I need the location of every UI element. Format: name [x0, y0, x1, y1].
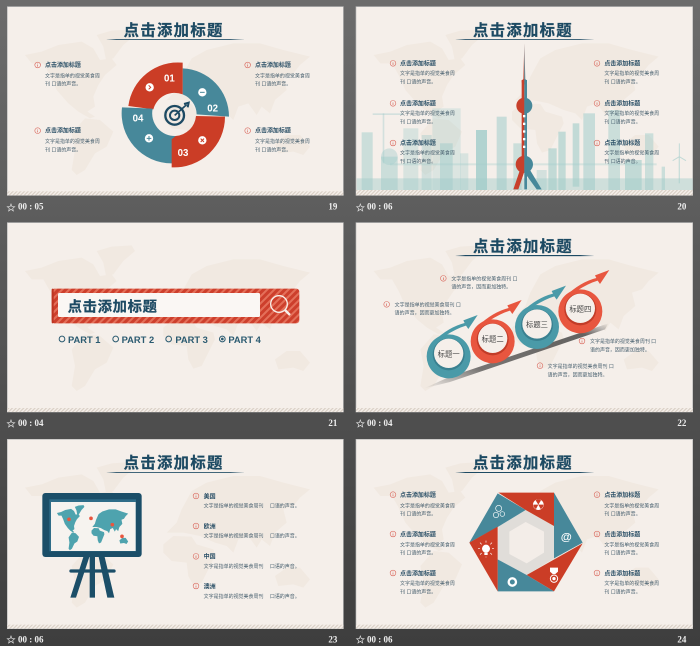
text block: right 2: 刊 口语的声音。 — [604, 550, 641, 557]
text block: left 1 — [390, 59, 455, 85]
step 4 — [558, 270, 609, 333]
text block: left 3 — [390, 139, 455, 165]
panel: slide 22 rising arrows — [356, 223, 693, 428]
step 1 — [427, 315, 478, 378]
icon: molecule — [493, 505, 505, 518]
text block: right 3: 点击添加标题 — [604, 569, 640, 577]
icon: magnifier — [271, 296, 290, 315]
text block: Australia: 澳洲 — [204, 582, 216, 590]
text block: left 2 — [390, 99, 455, 125]
footer: timer: 00 : 05 — [18, 202, 44, 212]
text block: lower right: 点击添加标题 — [255, 127, 291, 135]
title: 点击添加标题 — [124, 21, 224, 39]
text block: upper right: 刊 口语的声音。 — [255, 81, 291, 88]
text block: China: 中国 — [204, 553, 216, 561]
donut diagram: 03 — [178, 148, 189, 159]
icon: at sign: @ — [561, 531, 572, 543]
text block: left 1: 文字是指单的视觉美食周 — [400, 70, 455, 77]
title: 点击添加标题 — [473, 21, 573, 39]
footer: timer — [7, 634, 44, 644]
text block: left 3: 刊 口语的声音。 — [400, 589, 436, 596]
text block: left 1 — [390, 491, 455, 518]
text block: right 1: 点击添加标题 — [604, 491, 640, 499]
text block: right 3: 刊 口语的声音。 — [604, 158, 641, 165]
step 2 — [471, 300, 522, 363]
text block: right 1: 点击添加标题 — [604, 59, 640, 67]
tower — [513, 43, 542, 189]
step 3: 标题三 — [526, 320, 548, 329]
icon: light bulb — [478, 541, 494, 557]
text block: left 3: 点击添加标题 — [400, 139, 436, 147]
text block: bottom — [537, 363, 614, 378]
radio options: PART 1 — [68, 335, 100, 345]
text block: left 2: 点击添加标题 — [400, 530, 436, 538]
text block: right 2 — [594, 530, 659, 557]
radio options: PART 4 — [228, 335, 262, 345]
text block: left 1: 文字是指单的视觉美食周 — [400, 502, 455, 509]
footer: timer: 00 : 06 — [18, 634, 44, 644]
radio options: PART 3 — [175, 335, 208, 345]
footer: page number: 22 — [677, 418, 687, 428]
footer: timer — [7, 418, 44, 428]
text block: left 2: 刊 口语的声音。 — [400, 118, 436, 125]
title: 点击添加标题 — [473, 237, 573, 255]
panel: slide 24 hexagon — [356, 439, 693, 644]
text block: right 2: 刊 口语的声音。 — [604, 118, 641, 125]
text block: Europe: 文字是指单的视觉美食周刊 口语的声音。 — [204, 533, 300, 540]
text block: upper right: 点击添加标题 — [255, 61, 291, 69]
footer: page number: 23 — [328, 634, 338, 644]
text block: right 2 — [594, 99, 659, 125]
text block: upper left: 点击添加标题 — [45, 61, 81, 69]
text block: left 3 — [390, 569, 455, 596]
text block: left 2: 文字是指单的视觉美食周 — [400, 110, 455, 117]
text block: USA: 文字是指单的视觉美食周刊 口语的声音。 — [204, 503, 300, 510]
title: 点击添加标题 — [124, 454, 224, 472]
text block: bottom: 语的声音，因而更加独特。 — [548, 371, 607, 378]
text block: left 3: 刊 口语的声音。 — [400, 158, 436, 165]
footer: timer — [7, 202, 44, 212]
text block: left 1: 点击添加标题 — [400, 59, 436, 67]
footer: timer: 00 : 06 — [367, 634, 393, 644]
step 1: 标题一 — [438, 349, 460, 358]
text block: right 1: 刊 口语的声音。 — [604, 78, 641, 85]
text block: lower left: 刊 口语的声音。 — [45, 146, 81, 153]
text block: upper left: 文字是指单的视觉美食周 — [45, 72, 100, 79]
text block: USA — [193, 492, 300, 510]
text block: right 3 — [594, 139, 659, 165]
ground shadow — [424, 323, 608, 388]
text block: left 1: 刊 口语的声音。 — [400, 511, 436, 518]
text block: right 1: 文字是指单的视觉美食周 — [604, 70, 659, 77]
panel: slide 19 circular diagram — [7, 7, 343, 212]
icon: target — [165, 103, 189, 125]
text block: left 2: 文字是指单的视觉美食周 — [400, 542, 455, 549]
step 3 — [515, 286, 566, 349]
panel: slide 21 search bar — [7, 223, 343, 428]
text block: right 3: 刊 口语的声音。 — [604, 589, 641, 596]
search bar — [52, 289, 299, 323]
title: 点击添加标题 — [473, 454, 573, 472]
search bar title: 点击添加标题 — [68, 297, 158, 315]
text block: lower left — [35, 127, 100, 153]
text block: bottom: 文字是指单的视觉美食周刊 口 — [548, 363, 614, 370]
text block: left 3: 文字是指单的视觉美食周 — [400, 150, 455, 157]
footer: page number: 24 — [677, 634, 687, 644]
text block: Europe: 欧洲 — [204, 522, 216, 530]
text block: right 2: 点击添加标题 — [604, 99, 640, 107]
text block: left: 语的声音，因而更加独特。 — [395, 310, 454, 317]
text block: right 3: 点击添加标题 — [604, 139, 640, 147]
footer: page number: 19 — [328, 202, 338, 212]
donut diagram: 04 — [133, 114, 144, 125]
text block: left 2: 刊 口语的声音。 — [400, 550, 436, 557]
text block: top: 语的声音，因而更加独特。 — [451, 284, 511, 291]
text block: right 3 — [594, 569, 659, 596]
icon: cycle — [509, 578, 516, 586]
text block: left 2 — [390, 530, 455, 557]
text block: right 3: 文字是指单的视觉美食周 — [604, 580, 659, 587]
text block: right 1 — [594, 59, 659, 85]
text block: right 1 — [594, 491, 659, 518]
text block: right 3: 文字是指单的视觉美食周 — [604, 150, 659, 157]
text block: upper right: 文字是指单的视觉美食周 — [255, 72, 310, 79]
footer: timer: 00 : 04 — [18, 418, 44, 428]
donut diagram — [122, 62, 229, 167]
text block: upper left: 刊 口语的声音。 — [45, 81, 81, 88]
text block: Australia: 文字是指单的视觉美食周刊 口语的声音。 — [204, 593, 300, 600]
step 4: 标题四 — [569, 304, 591, 313]
icon: medal — [550, 568, 558, 582]
text block: right 2: 文字是指单的视觉美食周 — [604, 542, 659, 549]
text block: right 1: 刊 口语的声音。 — [604, 511, 641, 518]
footer: page number: 21 — [328, 418, 338, 428]
text block: lower left: 文字是指单的视觉美食周 — [45, 138, 100, 145]
footer: page number: 20 — [677, 202, 687, 212]
skyline — [357, 108, 693, 190]
panel: slide 20 skyline and tower — [356, 7, 693, 212]
donut diagram: 01 — [164, 74, 175, 85]
panel: slide 23 map board — [7, 439, 343, 644]
text block: left — [384, 301, 461, 317]
text block: lower right: 文字是指单的视觉美食周 — [255, 138, 310, 145]
footer: timer: 00 : 06 — [367, 202, 393, 212]
text block: top — [440, 275, 518, 291]
text block: China — [193, 553, 300, 570]
text block: upper right — [245, 61, 310, 88]
text block: top: 文字是指单的视觉美食周刊 口 — [451, 275, 518, 282]
text block: upper left — [35, 61, 100, 88]
text block: right 2: 点击添加标题 — [604, 530, 640, 538]
text block: right — [579, 338, 656, 353]
radio options: PART 2 — [122, 335, 154, 345]
step 2: 标题二 — [482, 334, 504, 343]
text block: right 2: 文字是指单的视觉美食周 — [604, 110, 659, 117]
text block: Europe — [193, 522, 300, 540]
text block: left 1: 刊 口语的声音。 — [400, 78, 436, 85]
text block: left 3: 文字是指单的视觉美食周 — [400, 580, 455, 587]
text block: left 1: 点击添加标题 — [400, 491, 436, 499]
text block: lower left: 点击添加标题 — [45, 127, 81, 135]
text block: right 1: 文字是指单的视觉美食周 — [604, 502, 659, 509]
text block: China: 文字是指单的视觉美食周刊 口语的声音。 — [204, 563, 300, 570]
icon: radiation — [533, 499, 544, 510]
text block: lower right: 刊 口语的声音。 — [255, 146, 291, 153]
hexagon diagram — [469, 493, 583, 591]
text block: right: 语的声音，因而更加独特。 — [590, 346, 650, 353]
text block: Australia — [193, 582, 300, 600]
text block: right: 文字是指单的视觉美食周刊 口 — [590, 338, 656, 345]
text block: left 3: 点击添加标题 — [400, 569, 436, 577]
easel with world map — [42, 493, 142, 598]
text block: USA: 美国 — [204, 492, 216, 500]
donut diagram: 02 — [207, 104, 218, 115]
footer: timer: 00 : 04 — [367, 418, 393, 428]
text block: left: 文字是指单的视觉美食周刊 口 — [395, 301, 461, 308]
text block: lower right — [245, 127, 310, 153]
radio options — [59, 335, 262, 345]
text block: left 2: 点击添加标题 — [400, 99, 436, 107]
